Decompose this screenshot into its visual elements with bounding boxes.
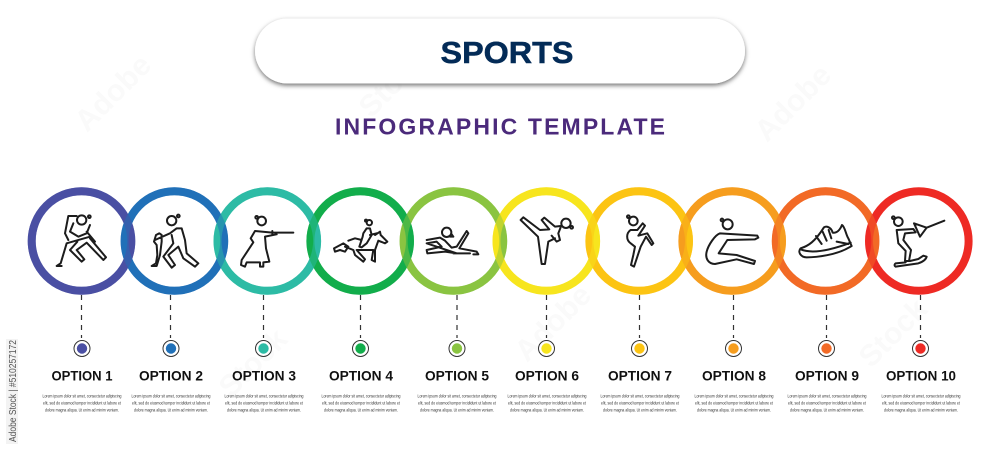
icon: running shoe [799, 225, 852, 257]
text: Stock [213, 323, 294, 404]
description 5: elit, sed do eiusmod tempor incididunt ut labore et [418, 400, 497, 406]
description 8: Lorem ipsum dolor sit amet, consectetur adipiscing [694, 394, 774, 398]
label 3: OPTION 3 [232, 368, 296, 384]
watermark id: Adobe Stock | #510257172 [7, 340, 19, 442]
marker 2 [163, 340, 179, 356]
description 10 [882, 394, 961, 412]
description 2: Lorem ipsum dolor sit amet, consectetur adipiscing [132, 394, 211, 398]
description 4 [322, 394, 401, 412]
description 3: dolore magna aliqua. Ut enim ad minim veniam. [227, 408, 301, 412]
label 6: OPTION 6 [515, 368, 579, 384]
description 9: dolore magna aliqua. Ut enim ad minim veniam. [790, 408, 864, 412]
description 7: dolore magna aliqua. Ut enim ad minim veniam. [603, 408, 677, 412]
subtitle: INFOGRAPHIC TEMPLATE [335, 114, 665, 140]
ring 5 [404, 191, 503, 291]
option 1 [32, 191, 131, 412]
marker 1 [74, 340, 90, 356]
ring 10 [869, 191, 969, 291]
marker 7 [632, 340, 648, 356]
description 4: Lorem ipsum dolor sit amet, consectetur adipiscing [322, 394, 401, 398]
option 6 [496, 191, 596, 412]
ring 7 [589, 191, 689, 291]
connector 9 [826, 295, 828, 338]
label 2: OPTION 2 [139, 368, 203, 384]
connector 10 [920, 295, 922, 338]
marker 9 [818, 340, 834, 356]
description 6: elit, sed do eiusmod tempor incididunt ut labore et [508, 400, 587, 406]
ring 2 [125, 191, 224, 291]
ring 3 [217, 191, 317, 291]
description 7: Lorem ipsum dolor sit amet, consectetur adipiscing [600, 394, 680, 398]
ring 1 [32, 191, 131, 291]
description 6 [508, 394, 587, 412]
option 4 [310, 191, 410, 412]
label 10: OPTION 10 [886, 368, 956, 384]
icon: long jumper [706, 219, 758, 264]
description 5: Lorem ipsum dolor sit amet, consectetur adipiscing [418, 394, 497, 398]
icon: fencer in dress [241, 216, 293, 267]
ring 8 [682, 191, 782, 291]
marker 10 [912, 340, 928, 356]
description 1: elit, sed do eiusmod tempor incididunt ut labore et [43, 400, 122, 406]
text: Adobe [509, 279, 598, 368]
connector 1 [80, 295, 82, 338]
text: Adobe [749, 59, 838, 148]
ring 9 [776, 191, 875, 291]
description 10: Lorem ipsum dolor sit amet, consectetur adipiscing [882, 394, 961, 398]
description 1: dolore magna aliqua. Ut enim ad minim veniam. [45, 408, 119, 412]
description 3 [224, 394, 304, 412]
description 2: dolore magna aliqua. Ut enim ad minim veniam. [134, 408, 208, 412]
description 3: Lorem ipsum dolor sit amet, consectetur adipiscing [224, 394, 304, 398]
label 9: OPTION 9 [795, 368, 859, 384]
option 10 [869, 191, 969, 412]
option 2 [125, 191, 224, 412]
description 8: dolore magna aliqua. Ut enim ad minim veniam. [697, 408, 771, 412]
option 5 [404, 191, 503, 412]
description 9: elit, sed do eiusmod tempor incididunt ut labore et [788, 400, 867, 406]
marker 6 [538, 340, 554, 356]
description 6: Lorem ipsum dolor sit amet, consectetur adipiscing [508, 394, 587, 398]
option 7 [589, 191, 689, 412]
description 4: dolore magna aliqua. Ut enim ad minim veniam. [324, 408, 398, 412]
connector 7 [638, 295, 640, 338]
icon: martial arts kick [521, 217, 573, 264]
marker 4 [352, 340, 368, 356]
title pill [255, 18, 745, 84]
description 9 [788, 394, 867, 412]
description 5 [418, 394, 497, 412]
label 5: OPTION 5 [425, 368, 489, 384]
label 1: OPTION 1 [52, 368, 113, 384]
description 10: dolore magna aliqua. Ut enim ad minim veniam. [884, 408, 958, 412]
description 2 [132, 394, 211, 412]
marker 8 [726, 340, 742, 356]
marker 3 [256, 340, 272, 356]
connector 4 [360, 295, 362, 338]
description 8 [694, 394, 774, 412]
label 8: OPTION 8 [702, 368, 766, 384]
description 7 [600, 394, 680, 412]
ring 6 [496, 191, 596, 291]
description 8: elit, sed do eiusmod tempor incididunt ut labore et [695, 400, 774, 406]
icon: female runner pose [627, 215, 653, 267]
description 3: elit, sed do eiusmod tempor incididunt ut labore et [225, 400, 304, 406]
connector 5 [456, 295, 458, 338]
label 4: OPTION 4 [329, 368, 393, 384]
icon: horse rider [334, 220, 387, 262]
description 1: Lorem ipsum dolor sit amet, consectetur adipiscing [42, 394, 122, 398]
description 9: Lorem ipsum dolor sit amet, consectetur adipiscing [788, 394, 867, 398]
ring 4 [310, 191, 410, 291]
title: SPORTS [440, 35, 574, 70]
description 1 [42, 394, 122, 412]
description 2: elit, sed do eiusmod tempor incididunt ut labore et [132, 400, 211, 406]
connector 3 [262, 295, 264, 338]
marker 5 [449, 340, 465, 356]
description 7: elit, sed do eiusmod tempor incididunt ut labore et [601, 400, 680, 406]
description 6: dolore magna aliqua. Ut enim ad minim veniam. [510, 408, 584, 412]
description 4: elit, sed do eiusmod tempor incididunt ut labore et [322, 400, 401, 406]
option 3 [217, 191, 317, 412]
connector 2 [170, 295, 172, 338]
connector 6 [546, 295, 548, 338]
icon: ice hockey player [57, 215, 106, 266]
option 8 [682, 191, 782, 412]
option 9 [776, 191, 875, 412]
text: Adobe [69, 49, 158, 138]
description 5: dolore magna aliqua. Ut enim ad minim veniam. [420, 408, 494, 412]
icon: floor gymnast [427, 228, 478, 254]
label 7: OPTION 7 [608, 368, 672, 384]
icon: water skier [892, 216, 944, 267]
description 10: elit, sed do eiusmod tempor incididunt ut labore et [882, 400, 961, 406]
icon: adult guiding child [152, 215, 198, 268]
connector 8 [732, 295, 734, 338]
text: Stock [853, 293, 934, 374]
text: Stock [353, 43, 434, 124]
